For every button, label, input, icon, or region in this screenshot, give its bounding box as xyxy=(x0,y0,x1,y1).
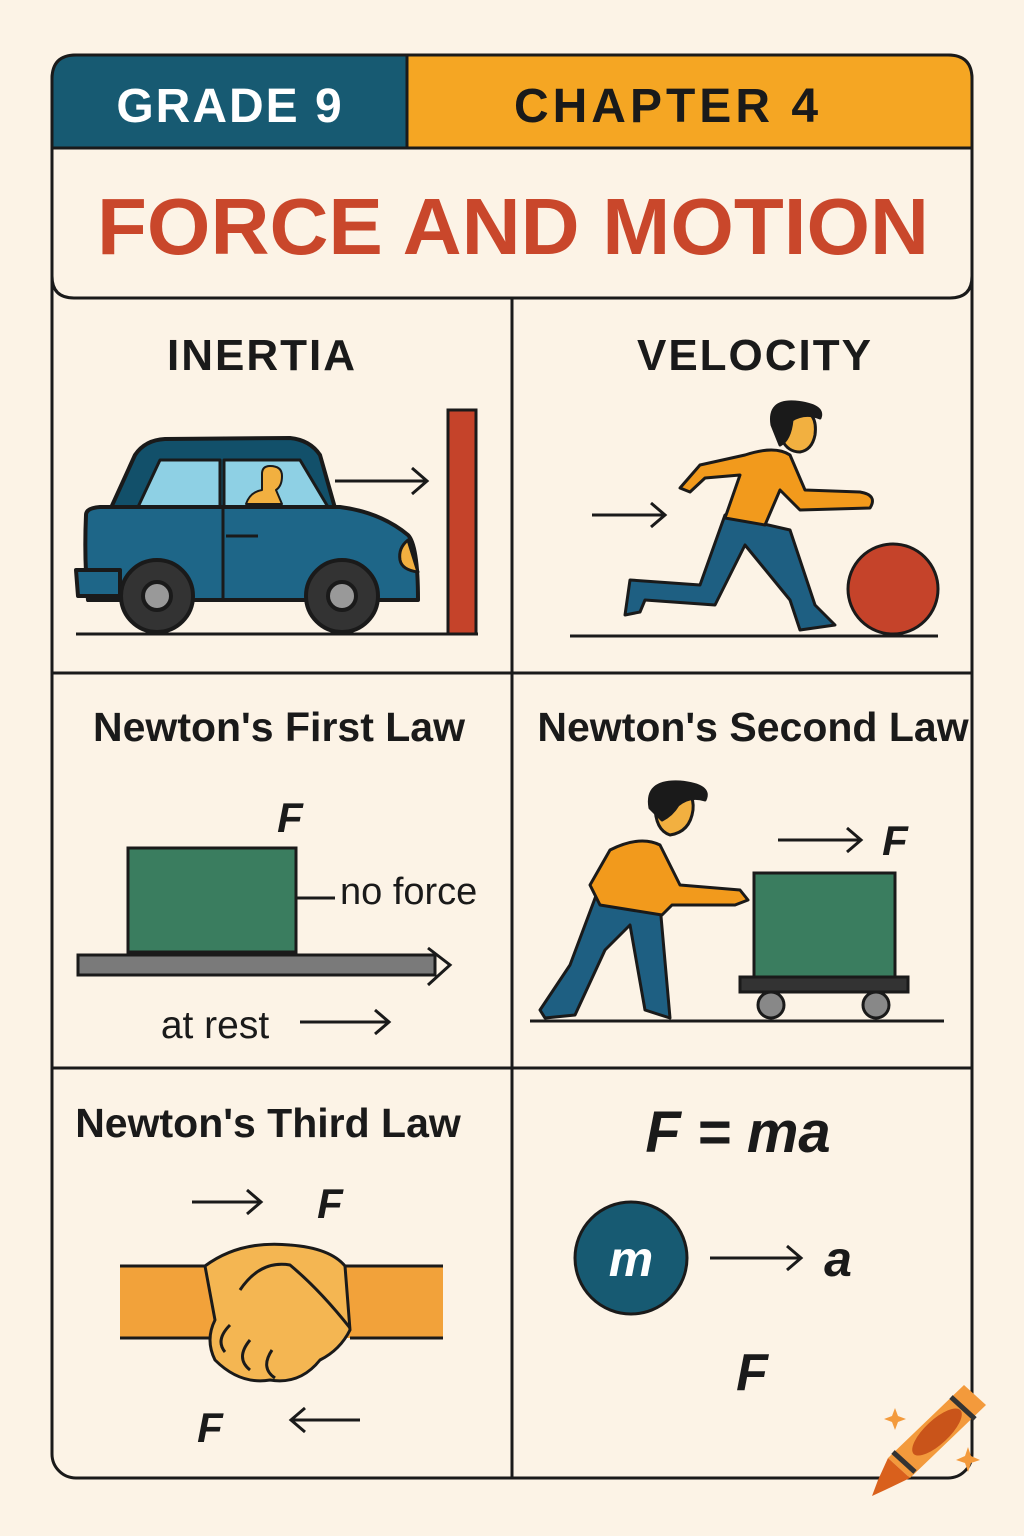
arrow xyxy=(335,468,427,494)
mass circle: m xyxy=(609,1231,653,1287)
title: FORCE AND MOTION xyxy=(97,182,929,271)
heading: Newton's First Law xyxy=(93,704,465,750)
header: chapter 4 xyxy=(407,55,972,148)
panel: F = ma: a xyxy=(824,1231,852,1287)
surface arrow xyxy=(78,948,450,985)
wall xyxy=(448,410,476,634)
label at rest: at rest xyxy=(161,1004,269,1047)
icon: car xyxy=(76,438,418,632)
heading: velocity: VELOCITY xyxy=(637,331,873,380)
heading: Newton's Second Law xyxy=(537,704,969,750)
mass circle xyxy=(575,1202,687,1314)
green box xyxy=(128,848,296,952)
panel: newton third law: F xyxy=(197,1404,224,1451)
panel: newton first law xyxy=(78,704,477,1047)
heading: Newton's Third Law xyxy=(75,1100,461,1146)
panel: newton third law xyxy=(75,1100,461,1451)
panel: F = ma xyxy=(575,1100,852,1402)
header: grade 9 xyxy=(52,55,407,148)
icon: handshake xyxy=(120,1244,443,1381)
title xyxy=(52,148,972,298)
header: chapter 4: CHAPTER 4 xyxy=(514,80,822,133)
panel: newton second law: F xyxy=(882,817,909,864)
arrow xyxy=(592,503,665,527)
icon: pushing person xyxy=(540,782,748,1018)
panel: inertia xyxy=(76,331,478,634)
label F: F xyxy=(277,794,304,841)
heading: inertia: INERTIA xyxy=(167,331,357,380)
icon: crayon xyxy=(872,1385,986,1496)
ball xyxy=(848,544,938,634)
label no force: no force xyxy=(340,871,477,913)
panel: newton third law: F xyxy=(317,1180,344,1227)
header: grade 9: GRADE 9 xyxy=(116,80,344,133)
formula: F = ma xyxy=(645,1100,831,1165)
panel: velocity xyxy=(570,331,938,636)
icon: runner xyxy=(625,402,872,630)
cart with box xyxy=(740,873,908,1018)
panel: newton second law xyxy=(530,704,969,1021)
panel: F = ma: F xyxy=(736,1344,769,1402)
force arrow F xyxy=(778,828,861,852)
